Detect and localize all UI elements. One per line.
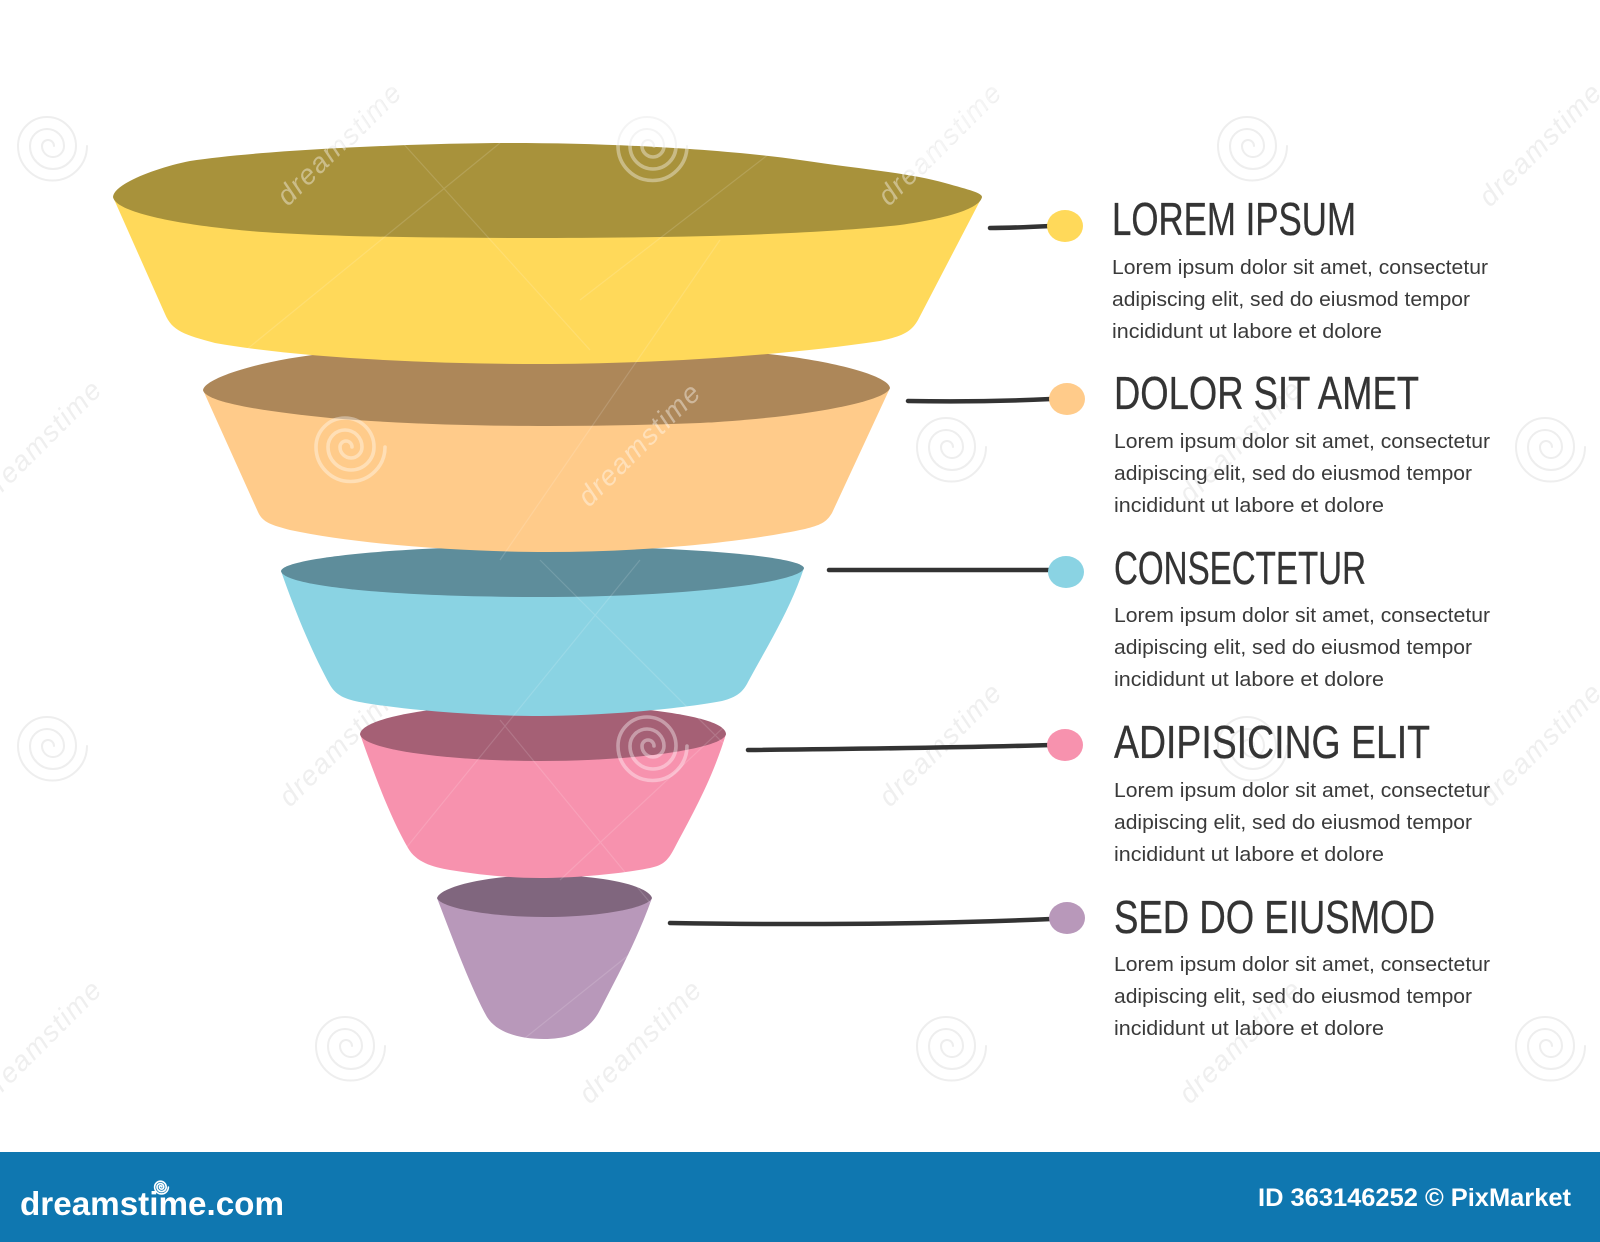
item 5: sed do eiusmod: [670, 891, 1490, 1040]
marker dot 2: [1049, 383, 1085, 415]
funnel layer 3: blue: [281, 546, 804, 716]
watermark wordmarks on background: dreamstime: [1172, 973, 1308, 1109]
body text 1: adipiscing elit, sed do eiusmod tempor: [1112, 288, 1470, 311]
funnel layer 2: orange: [203, 347, 890, 552]
connector line 1: [990, 226, 1051, 228]
connector line 4: [748, 745, 1051, 750]
marker dot 4: [1047, 729, 1083, 761]
item 4: adipisicing elit: [748, 716, 1490, 866]
footer band: [0, 1152, 1600, 1242]
body text 3: Lorem ipsum dolor sit amet, consectetur: [1114, 604, 1490, 627]
item 2: dolor sit amet: [908, 367, 1490, 517]
marker dot 3: [1048, 556, 1084, 588]
watermark wordmarks on background: dreamstime: [872, 76, 1008, 212]
heading 2: DOLOR SIT AMET: [1114, 367, 1419, 419]
connector line 2: [908, 399, 1051, 401]
item 3: consectetur: [829, 542, 1490, 691]
item 1: lorem ipsum: [990, 193, 1488, 343]
body text 5: adipiscing elit, sed do eiusmod tempor: [1114, 985, 1472, 1008]
footer logo: dreamstime.com: [20, 1185, 284, 1222]
funnel: [113, 143, 982, 1039]
body text 5: Lorem ipsum dolor sit amet, consectetur: [1114, 953, 1490, 976]
body text 1: incididunt ut labore et dolore: [1112, 320, 1382, 343]
watermark wordmarks over funnel: dreamstime: [871, 75, 1007, 211]
watermark wordmarks over funnel: dreamstime: [270, 75, 406, 211]
body text 1: [1112, 256, 1488, 343]
body text 2: Lorem ipsum dolor sit amet, consectetur: [1114, 430, 1490, 453]
footer image id: ID 363146252 © PixMarket: [1258, 1184, 1572, 1212]
heading 1: LOREM IPSUM: [1112, 193, 1356, 245]
watermark wordmarks on background: dreamstime: [572, 973, 708, 1109]
body text 5: [1114, 953, 1490, 1040]
marker dot 1: [1047, 210, 1083, 242]
body text 4: incididunt ut labore et dolore: [1114, 843, 1384, 866]
marker dot 5: [1049, 902, 1085, 934]
body text 3: [1114, 604, 1490, 691]
watermark wordmarks on background: dreamstime: [272, 76, 408, 212]
body text 4: [1114, 779, 1490, 866]
connector line 3: [829, 568, 1051, 572]
funnel layer 4: pink: [360, 706, 726, 878]
heading 3: CONSECTETUR: [1114, 542, 1366, 594]
body text 2: adipiscing elit, sed do eiusmod tempor: [1114, 462, 1472, 485]
body text 4: Lorem ipsum dolor sit amet, consectetur: [1114, 779, 1490, 802]
watermark overlay on funnel: [316, 117, 687, 780]
body text 3: adipiscing elit, sed do eiusmod tempor: [1114, 636, 1472, 659]
body text 4: adipiscing elit, sed do eiusmod tempor: [1114, 811, 1472, 834]
funnel layer 5: purple: [437, 875, 652, 1039]
body text 5: incididunt ut labore et dolore: [1114, 1017, 1384, 1040]
logo spiral icon: [155, 1181, 168, 1194]
watermark lines over funnel: [160, 130, 860, 1130]
watermark wordmarks on background: dreamstime: [872, 676, 1008, 812]
body text 1: Lorem ipsum dolor sit amet, consectetur: [1112, 256, 1488, 279]
watermark spirals on background: [18, 117, 1585, 1080]
watermark wordmarks on background: dreamstime: [272, 676, 408, 812]
heading 4: ADIPISICING ELIT: [1114, 716, 1430, 768]
heading 5: SED DO EIUSMOD: [1114, 891, 1435, 943]
watermark wordmarks over funnel: dreamstime: [571, 376, 707, 512]
body text 3: incididunt ut labore et dolore: [1114, 668, 1384, 691]
body text 2: [1114, 430, 1490, 517]
body text 2: incididunt ut labore et dolore: [1114, 494, 1384, 517]
watermark wordmarks on background: dreamstime: [1172, 373, 1308, 509]
connector line 5: [670, 919, 1051, 924]
funnel layer 1: yellow: [113, 143, 982, 364]
watermark wordmarks over funnel: [270, 75, 1007, 512]
